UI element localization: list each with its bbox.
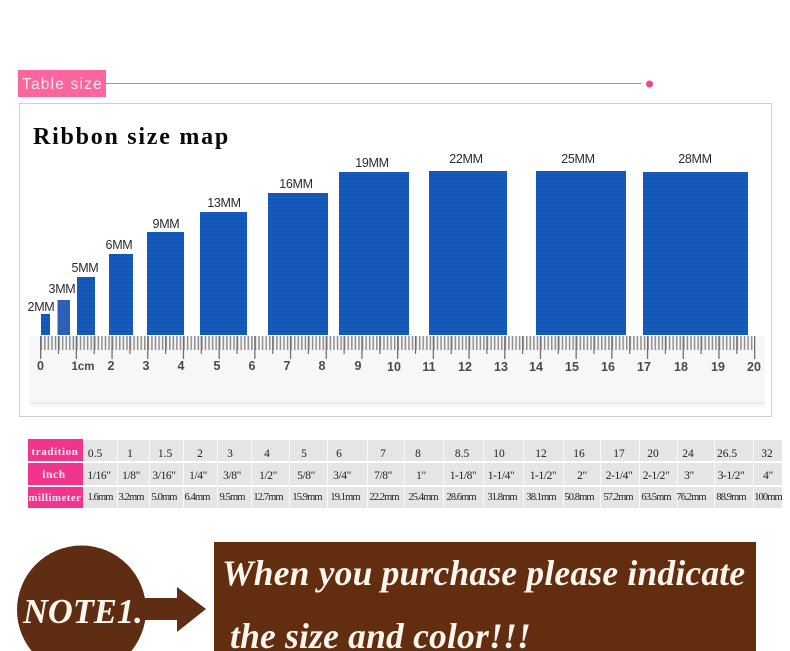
row headers: millimeter xyxy=(29,492,81,504)
row: millimeter values: 38.1mm xyxy=(526,492,556,503)
row: millimeter values: 22.2mm xyxy=(369,492,399,503)
row: millimeter values: 9.5mm xyxy=(220,492,245,503)
row: millimeter values: 100mm xyxy=(754,492,783,503)
ruler numbers: 14 xyxy=(529,360,543,374)
row: millimeter values: 15.9mm xyxy=(292,492,322,503)
ruler numbers: 9 xyxy=(355,359,362,373)
row: inch values: 4" xyxy=(763,470,773,482)
ribbon bar labels xyxy=(28,152,712,314)
size conversion table xyxy=(28,439,783,508)
ruler numbers: 7 xyxy=(284,359,291,373)
row: inch values: 1" xyxy=(416,470,426,482)
row: millimeter values: 6.4mm xyxy=(185,492,210,503)
row: millimeter values: 57.2mm xyxy=(603,492,633,503)
row: inch values: 2-1/4" xyxy=(606,470,632,482)
row: inch values: 1-1/2" xyxy=(530,470,556,482)
ribbon bar labels: 25MM xyxy=(561,152,595,166)
ruler xyxy=(30,336,765,407)
ruler numbers: 13 xyxy=(494,360,508,374)
ruler numbers: 6 xyxy=(249,359,256,373)
row: tradition values: 7 xyxy=(380,448,386,460)
row: inch values: 1/2" xyxy=(259,470,277,482)
row: millimeter values: 1.6mm xyxy=(88,492,113,503)
ruler numbers: 12 xyxy=(458,360,472,374)
row: tradition values: 10 xyxy=(493,448,505,460)
ruler numbers: 2 xyxy=(108,359,115,373)
row headers: tradition xyxy=(32,446,78,458)
row: tradition values: 17 xyxy=(613,448,625,460)
row: inch values: 1/16" xyxy=(87,470,111,482)
row: inch values: 3/4" xyxy=(333,470,351,482)
ribbon bar labels: 16MM xyxy=(279,177,313,191)
ribbon bar labels: 3MM xyxy=(49,282,75,296)
row: inch values: 1/8" xyxy=(122,470,140,482)
row: tradition values: 8.5 xyxy=(455,448,469,460)
ribbon bar labels: 6MM xyxy=(106,238,132,252)
note badge: circle xyxy=(17,546,146,651)
row: millimeter values xyxy=(88,492,783,503)
ruler numbers: 17 xyxy=(637,360,651,374)
row: tradition values: 16 xyxy=(573,448,585,460)
row: inch values: 3" xyxy=(684,470,694,482)
arrow xyxy=(145,587,206,632)
row: inch values: 1-1/4" xyxy=(488,470,514,482)
panel: ribbon size map xyxy=(20,104,772,416)
ribbon bar labels: 19MM xyxy=(355,156,389,170)
row: tradition values: 1.5 xyxy=(158,448,172,460)
heading rule with dot xyxy=(106,80,653,88)
ruler numbers: 3 xyxy=(143,359,150,373)
row: tradition values: 5 xyxy=(301,448,307,460)
row: tradition values: 0.5 xyxy=(88,448,102,460)
ribbon bar labels: 5MM xyxy=(72,261,98,275)
ruler numbers: 8 xyxy=(319,359,326,373)
ribbon bar labels: 9MM xyxy=(153,217,179,231)
row: millimeter values: 28.6mm xyxy=(446,492,476,503)
row: tradition values: 1 xyxy=(127,448,133,460)
row: millimeter values: 25.4mm xyxy=(408,492,438,503)
row: inch values: 3/16" xyxy=(152,470,176,482)
row: inch values: 1-1/8" xyxy=(450,470,476,482)
row: millimeter values: 50.8mm xyxy=(564,492,594,503)
row headers xyxy=(28,439,83,508)
row: tradition values xyxy=(88,448,773,460)
panel title: Ribbon size map xyxy=(33,124,230,150)
row: millimeter values: 88.9mm xyxy=(716,492,746,503)
ruler numbers: 0 xyxy=(37,359,44,373)
row: tradition values: 2 xyxy=(197,448,203,460)
row: inch values: 1/4" xyxy=(189,470,207,482)
row: tradition values: 26.5 xyxy=(717,448,737,460)
row: inch values: 5/8" xyxy=(297,470,315,482)
note badge: circle: NOTE1. xyxy=(22,593,143,631)
callout: purchase note xyxy=(214,542,756,651)
row: millimeter values: 19.1mm xyxy=(330,492,360,503)
row: tradition values: 8 xyxy=(415,448,421,460)
ruler numbers: 19 xyxy=(711,360,725,374)
ruler numbers xyxy=(37,359,761,374)
row: millimeter values: 5.0mm xyxy=(152,492,177,503)
row: tradition values: 12 xyxy=(535,448,547,460)
ribbon bar labels: 13MM xyxy=(207,196,241,210)
row: inch values: 2-1/2" xyxy=(643,470,669,482)
ruler numbers: 1cm xyxy=(71,361,95,373)
row: inch values: 3-1/2" xyxy=(718,470,744,482)
row: tradition values: 4 xyxy=(264,448,270,460)
row: millimeter values: 3.2mm xyxy=(119,492,144,503)
heading tag: Table size: Table size xyxy=(22,76,103,93)
row: millimeter values: 31.8mm xyxy=(487,492,517,503)
row: millimeter values: 76.2mm xyxy=(676,492,706,503)
ribbon bars chart xyxy=(41,171,748,335)
row: inch values: 7/8" xyxy=(374,470,392,482)
ribbon bar labels: 2MM xyxy=(28,300,54,314)
row: tradition values: 24 xyxy=(682,448,694,460)
ruler numbers: 4 xyxy=(178,359,185,373)
row: tradition values: 3 xyxy=(227,448,233,460)
row headers: inch xyxy=(42,469,66,481)
ribbon bar labels: 28MM xyxy=(678,152,712,166)
ruler numbers: 11 xyxy=(422,360,436,374)
heading tag: Table size xyxy=(18,70,106,97)
callout: purchase note: When you purchase please indicate xyxy=(222,553,745,593)
row: inch values: 2" xyxy=(577,470,587,482)
table cell backgrounds xyxy=(83,440,782,508)
row: inch values: 3/8" xyxy=(223,470,241,482)
ruler numbers: 20 xyxy=(747,360,761,374)
row: tradition values: 32 xyxy=(761,448,773,460)
row: inch values xyxy=(87,470,773,482)
row: millimeter values: 63.5mm xyxy=(641,492,671,503)
ruler numbers: 16 xyxy=(601,360,615,374)
ruler numbers: 10 xyxy=(387,360,401,374)
ruler numbers: 5 xyxy=(214,359,221,373)
ribbon bar labels: 22MM xyxy=(449,152,483,166)
row: millimeter values: 12.7mm xyxy=(253,492,283,503)
ruler numbers: 18 xyxy=(674,360,688,374)
row: tradition values: 6 xyxy=(336,448,342,460)
ruler numbers: 15 xyxy=(565,360,579,374)
row: tradition values: 20 xyxy=(647,448,659,460)
